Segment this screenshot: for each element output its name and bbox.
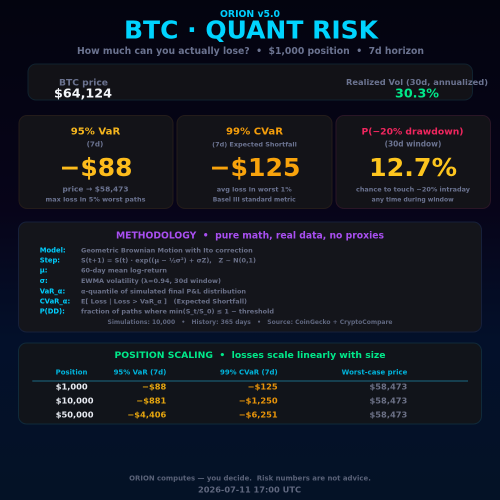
methodology labels: CVaR_α: <box>40 297 70 305</box>
BTC price: BTC price <box>59 78 108 88</box>
panel: 95% VaR: 95% VaR <box>71 126 121 138</box>
table header: Position <box>56 369 87 377</box>
methodology labels: P(DD): <box>40 308 65 316</box>
methodology definitions: α-quantile of simulated final P&L distribution <box>81 287 246 295</box>
panel: drawdown probability: 12.7% <box>369 153 457 182</box>
panel: price and volatility strip <box>28 64 488 100</box>
panel: 95% VaR: price → $58,473 <box>62 185 128 194</box>
realized volatility: 30.3% <box>395 86 439 100</box>
table header: 95% VaR (7d) <box>114 369 166 377</box>
methodology definitions: S(t+1) = S(t) · exp((μ − ½σ²) + σZ), Z ~ N(0,1) <box>81 257 256 265</box>
table header <box>56 369 408 377</box>
methodology labels: μ: <box>40 267 47 275</box>
disclaimer: ORION computes — you decide. Risk numbers are not advice. <box>129 475 371 483</box>
methodology labels: Step: <box>40 257 60 265</box>
panel: 99% CVaR: 99% CVaR <box>226 126 283 138</box>
timestamp: 2026-07-11 17:00 UTC <box>198 484 301 494</box>
table rows: $58,473 <box>370 409 408 419</box>
methodology definitions: EWMA volatility (λ=0.94, 30d window) <box>81 277 221 285</box>
methodology labels: Model: <box>40 246 66 254</box>
panel: position scaling <box>18 343 482 424</box>
eyebrow: ORION v5.0: ORION v5.0 <box>220 9 281 20</box>
panel: 99% CVaR: −$125 <box>210 153 300 182</box>
table rows: $58,473 <box>370 396 408 406</box>
methodology footnote: Simulations: 10,000 • History: 365 days • Source: CoinGecko + CryptoCompare <box>108 320 392 326</box>
methodology labels: σ: <box>40 277 48 285</box>
footer <box>129 475 371 494</box>
title: BTC · QUANT RISK <box>124 16 380 44</box>
table rows: −$88 <box>142 382 167 392</box>
methodology heading: METHODOLOGY • pure math, real data, no proxies <box>116 231 384 242</box>
panel: 95% VaR <box>19 116 173 208</box>
methodology definitions: E[ Loss | Loss > VaR_α ] (Expected Shortfall) <box>81 297 247 306</box>
methodology definitions: Geometric Brownian Motion with Ito correction <box>81 246 253 254</box>
panel: drawdown probability: P(−20% drawdown) <box>362 128 464 138</box>
realized volatility: Realized Vol (30d, annualized) <box>346 77 488 87</box>
panel: 95% VaR: max loss in 5% worst paths <box>46 196 146 204</box>
table rows: $1,000 <box>56 382 88 392</box>
panel: 99% CVaR <box>177 116 332 208</box>
panel: drawdown probability: (30d window) <box>385 140 441 148</box>
header <box>77 9 424 57</box>
subtitle: How much can you actually lose? • $1,000 position • 7d horizon <box>77 46 424 57</box>
panel: 99% CVaR: Basel III standard metric <box>213 197 296 204</box>
panel: methodology <box>18 222 482 332</box>
panel: 99% CVaR: avg loss in worst 1% <box>217 186 292 194</box>
methodology definitions <box>81 246 274 316</box>
table rows: −$125 <box>248 382 278 392</box>
table rows: −$1,250 <box>239 396 278 406</box>
methodology definitions: 60-day mean log-return <box>81 267 167 275</box>
table rows: −$4,406 <box>127 409 167 419</box>
panel: drawdown probability: chance to touch −20% intraday <box>356 186 471 194</box>
BTC price <box>54 78 112 100</box>
table rows: −$6,251 <box>239 409 278 419</box>
methodology definitions: fraction of paths where min(S_t/S_0) ≤ 1 − threshold <box>81 308 274 316</box>
panel: 95% VaR: (7d) <box>87 140 103 148</box>
methodology labels: VaR_α: <box>40 287 65 295</box>
panel: 99% CVaR: (7d) Expected Shortfall <box>212 140 297 148</box>
table header: Worst-case price <box>342 369 408 377</box>
panel: 95% VaR: −$88 <box>60 153 132 182</box>
panel: drawdown probability: any time during window <box>372 198 454 204</box>
table rows: −$881 <box>136 396 167 406</box>
methodology labels <box>40 246 70 316</box>
position scaling heading: POSITION SCALING • losses scale linearly with size <box>114 350 386 361</box>
table rows <box>56 382 408 419</box>
BTC price: $64,124 <box>54 86 112 100</box>
realized volatility <box>346 77 488 100</box>
table rows: $10,000 <box>56 396 94 406</box>
table rows: $58,473 <box>370 382 408 392</box>
table header: 99% CVaR (7d) <box>220 369 278 377</box>
panel: drawdown probability <box>336 116 490 208</box>
table rows: $50,000 <box>56 409 94 419</box>
